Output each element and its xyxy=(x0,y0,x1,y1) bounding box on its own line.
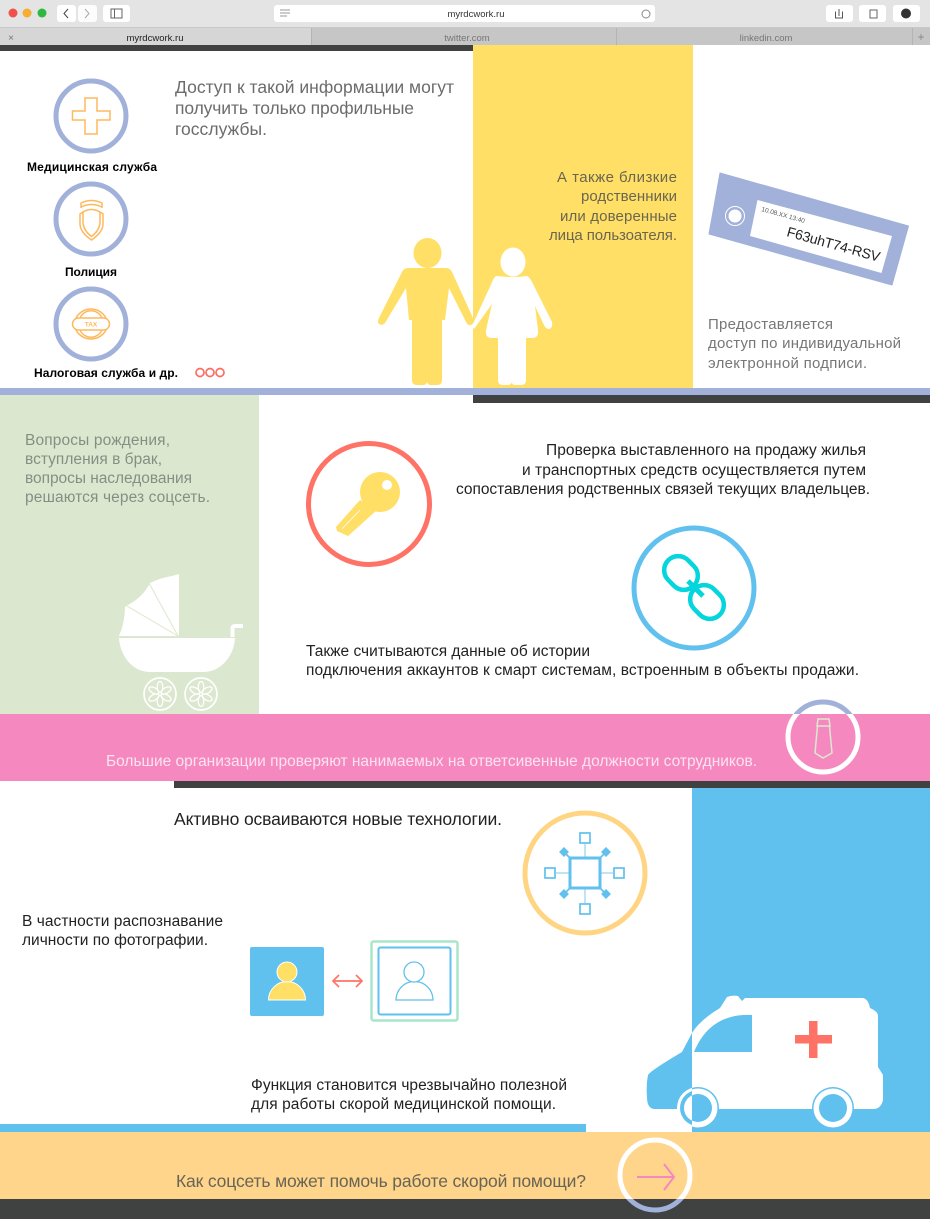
text: electronic signature xyxy=(708,316,901,372)
text: life events: вопросы наследования xyxy=(25,470,192,487)
text: electronic signature: Предоставляется xyxy=(708,316,833,333)
icon: next arrow xyxy=(620,1140,690,1210)
icon: police xyxy=(56,184,126,254)
text: smart systems: Также считываются данные об истории xyxy=(306,643,590,660)
text: relatives: А также близкие xyxy=(557,169,677,186)
text: property check xyxy=(456,442,870,498)
panel: browser chrome: × xyxy=(8,33,14,44)
text: life events: вступления в брак, xyxy=(25,451,162,468)
icon: electronic signature ticket xyxy=(709,173,908,285)
icon: woman figure xyxy=(472,248,552,385)
text: access info xyxy=(175,77,454,139)
icon: electronic signature ticket: 10.08.XX 13:40 xyxy=(760,206,806,225)
dark divider xyxy=(174,781,930,788)
text: new technologies: Активно осваиваются новые технологии. xyxy=(174,809,502,829)
icon: electronic signature ticket: F63uhT74-RSV xyxy=(785,223,883,265)
text: face recognition: личности по фотографии. xyxy=(22,932,208,949)
panel: browser chrome xyxy=(0,0,930,45)
icon: tax service: TAX xyxy=(85,322,98,328)
text: property check: Проверка выставленного на продажу жилья xyxy=(546,442,866,459)
text: ambulance function: для работы скорой медицинской помощи. xyxy=(251,1096,556,1113)
text: electronic signature: доступ по индивидуальной xyxy=(708,335,901,352)
top dark bar xyxy=(0,45,473,51)
text: access info: госслужбы. xyxy=(175,119,267,139)
text: smart systems: подключения аккаунтов к смарт системам, встроенным в объекты продажи. xyxy=(306,662,859,679)
text: life events: Вопросы рождения, xyxy=(25,432,170,449)
icon: chain link xyxy=(634,528,754,648)
text: ambulance function: Функция становится чрезвычайно полезной xyxy=(251,1077,567,1094)
icon: tax service xyxy=(56,289,126,359)
icon: photo card xyxy=(250,947,324,1016)
panel: browser chrome: myrdcwork.ru xyxy=(447,9,505,20)
text: organizations: Большие организации проверяют нанимаемых на ответсивенные должности сотрудников. xyxy=(106,753,757,770)
panel: green column xyxy=(0,395,259,714)
text: access info: получить только профильные xyxy=(175,98,414,118)
panel: browser chrome: twitter.com xyxy=(444,33,490,44)
panel: browser chrome: myrdcwork.ru xyxy=(126,33,184,44)
icon: key xyxy=(308,444,430,564)
icon: three dots xyxy=(196,368,224,376)
lavender divider xyxy=(0,388,930,395)
label: tax service: Налоговая служба и др. xyxy=(34,366,178,380)
text: smart systems xyxy=(306,643,859,679)
text: question: Как соцсеть может помочь работе скорой помощи? xyxy=(176,1171,586,1191)
label: medical service: Медицинская служба xyxy=(27,160,157,174)
text: property check: и транспортных средств осуществляется путем xyxy=(522,462,866,479)
blue stripe xyxy=(0,1124,586,1132)
text: ambulance function xyxy=(251,1077,567,1113)
panel: browser chrome: + xyxy=(917,30,925,44)
arrow: two-way comparison xyxy=(333,975,362,987)
panel: pink band xyxy=(0,714,930,781)
text: relatives xyxy=(549,169,677,244)
text: relatives: родственники xyxy=(581,188,677,205)
text: electronic signature: электронной подписи. xyxy=(708,355,867,372)
panel: browser chrome: linkedin.com xyxy=(740,33,792,44)
text: life events: решаются через соцсеть. xyxy=(25,489,210,506)
icon: tie xyxy=(788,702,858,772)
text: face recognition: В частности распознавание xyxy=(22,913,223,930)
text: face recognition xyxy=(22,913,223,949)
dark divider xyxy=(473,395,930,403)
label: police: Полиция xyxy=(65,265,117,279)
icon: man figure xyxy=(378,238,474,385)
panel: blue column xyxy=(692,788,930,1132)
panel: yellow column xyxy=(473,45,693,388)
panel: dark footer xyxy=(0,1199,930,1219)
text: relatives: лица пользоателя. xyxy=(549,227,677,244)
icon: ambulance xyxy=(647,996,883,1129)
text: relatives: или доверенные xyxy=(560,208,677,225)
text: property check: сопоставления родственных связей текущих владельцев. xyxy=(456,481,870,498)
icon: medical service xyxy=(56,81,126,151)
icon: baby stroller xyxy=(119,574,243,710)
text: life events xyxy=(25,432,210,506)
panel: orange band xyxy=(0,1132,930,1199)
icon: network xyxy=(525,813,645,933)
icon: recognized portrait xyxy=(372,942,458,1020)
text: access info: Доступ к такой информации могут xyxy=(175,77,454,97)
